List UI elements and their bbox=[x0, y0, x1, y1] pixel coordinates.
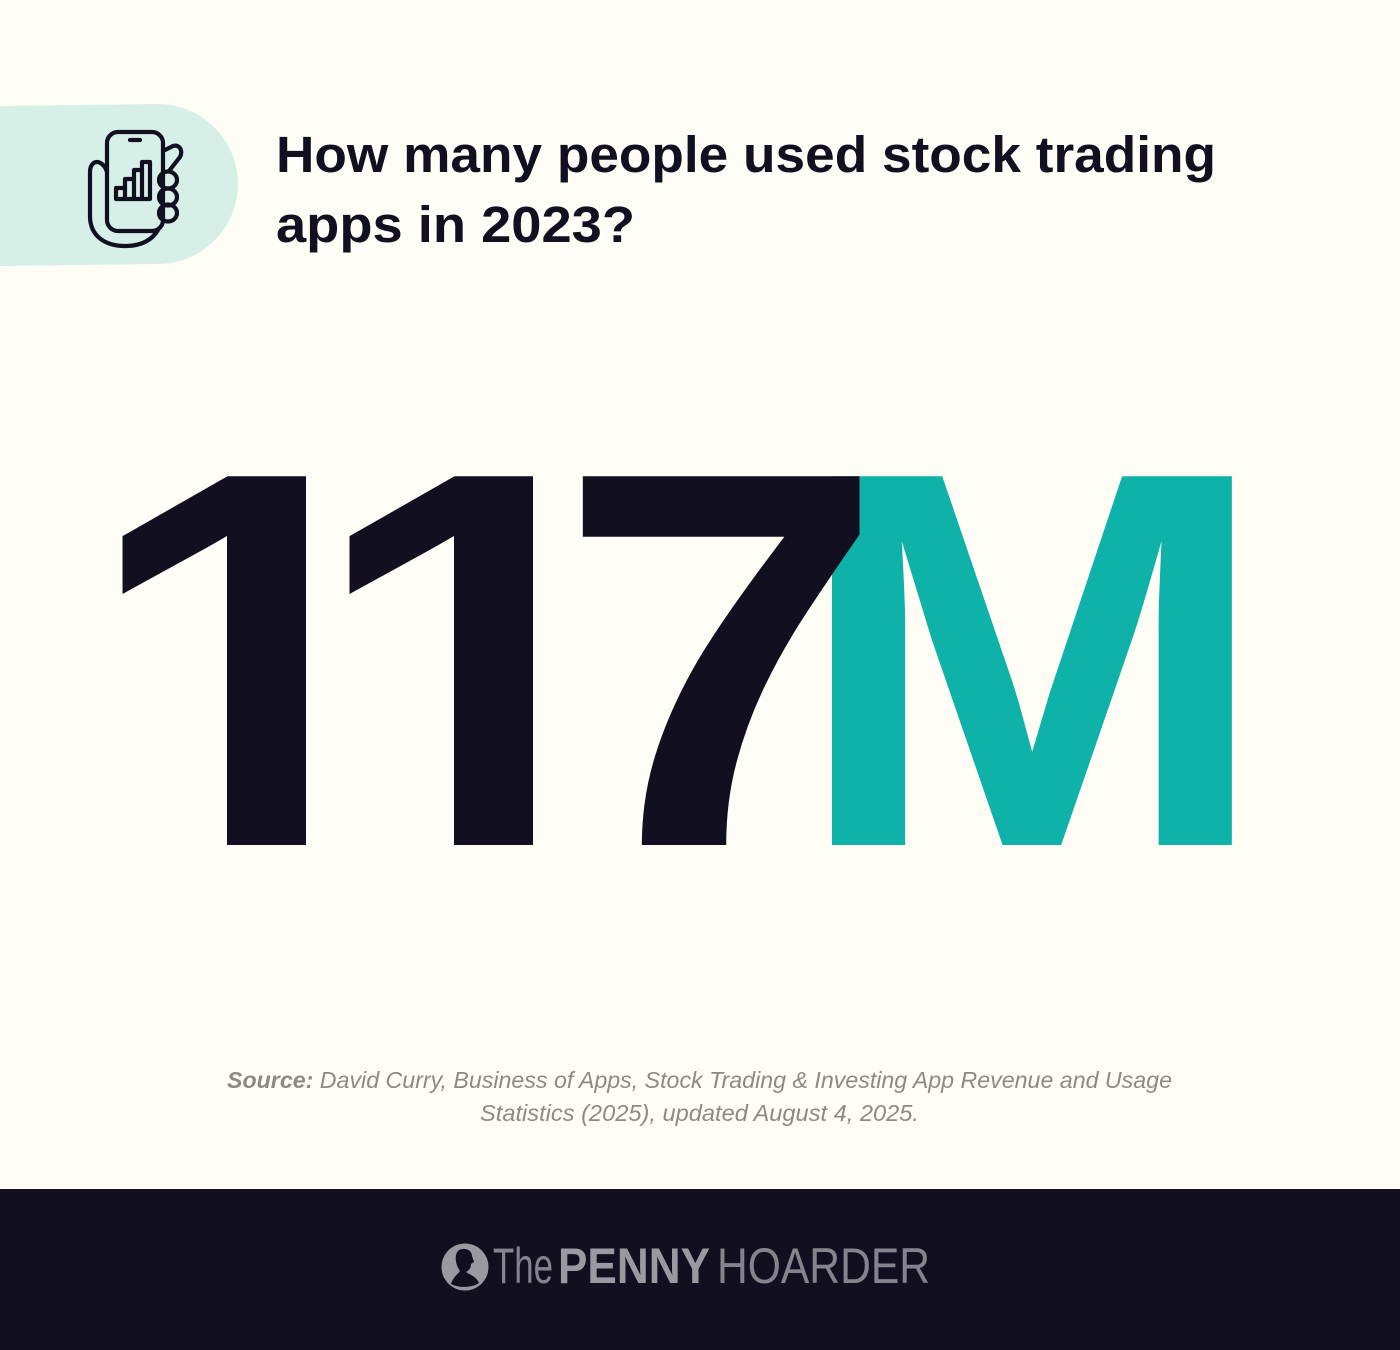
second digit 1: 1 bbox=[308, 360, 647, 959]
logo wordmark bbox=[493, 1238, 930, 1294]
letter M: M bbox=[794, 360, 1270, 959]
logo wordmark: HOARDER bbox=[717, 1238, 930, 1294]
title bbox=[276, 126, 1216, 253]
icon: phone with bar chart held in hand bbox=[90, 132, 181, 246]
title: How many people used stock trading bbox=[276, 126, 1216, 183]
icon badge background bbox=[0, 104, 238, 266]
big statistic: 117M bbox=[122, 476, 1232, 845]
footer band bbox=[0, 1189, 1400, 1350]
title: apps in 2023? bbox=[276, 196, 635, 253]
logo wordmark: The bbox=[493, 1238, 553, 1294]
logo wordmark: PENNY bbox=[558, 1238, 710, 1294]
source note bbox=[227, 1067, 1172, 1126]
source note: Statistics (2025), updated August 4, 2025. bbox=[480, 1100, 919, 1126]
source note: Source: David Curry, Business of Apps, Stock Trading & Investing App Revenue and Usage bbox=[227, 1067, 1172, 1093]
logo: The Penny Hoarder bbox=[442, 1238, 930, 1294]
digit 7: 7 bbox=[558, 361, 885, 959]
digit 1: 1 bbox=[81, 360, 420, 959]
logo emblem: silhouette medallion bbox=[442, 1244, 488, 1290]
